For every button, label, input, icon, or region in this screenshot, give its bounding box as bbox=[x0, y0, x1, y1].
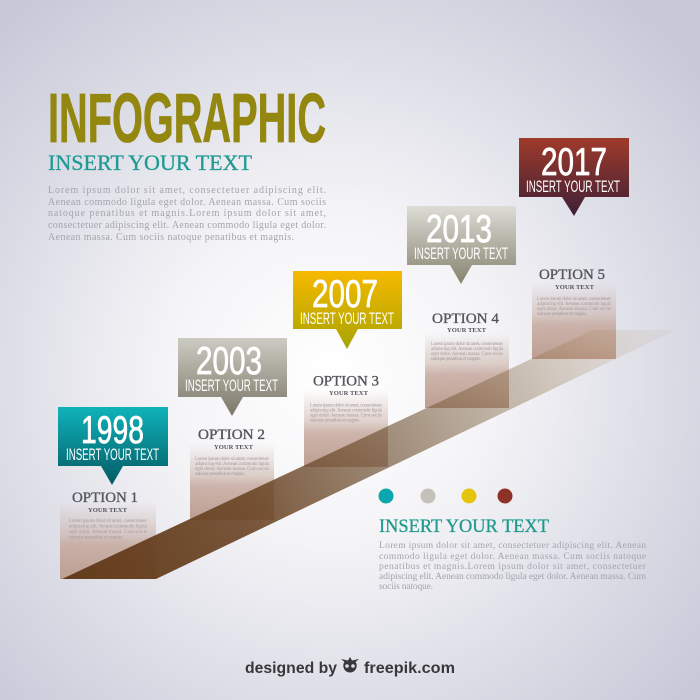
option 4 text bbox=[431, 311, 504, 362]
option card 3 bbox=[304, 390, 388, 467]
callout 1998: 1998 bbox=[81, 409, 144, 452]
lower text block bbox=[379, 541, 647, 592]
option 1 text bbox=[69, 490, 148, 540]
option card 2 bbox=[190, 443, 274, 520]
diagonal ribbon bbox=[62, 330, 676, 579]
intro text block: Lorem ipsum dolor sit amet, consectetuer adipiscing elit. bbox=[48, 185, 326, 196]
intro text block: consectetuer adipiscing elit. Aenean commodo ligula eget dolor. bbox=[48, 220, 326, 231]
intro text block: natoque penatibus et magnis.Lorem ipsum dolor sit amet, bbox=[48, 208, 326, 219]
option 5 text: natoque penatibus et magnis. bbox=[537, 312, 587, 317]
callout 2013: 2013 bbox=[426, 208, 492, 251]
option 5 text bbox=[537, 267, 612, 317]
option 5 text: Lorem ipsum dolor sit amet, consectetuer bbox=[537, 297, 611, 302]
callout 2007 bbox=[293, 271, 402, 349]
callout 2007: 2007 bbox=[312, 273, 378, 316]
callout 2003 bbox=[178, 338, 287, 416]
option 3 text: adipiscing elit. Aenean commodo ligula bbox=[310, 408, 383, 414]
footer credit: designed by bbox=[245, 660, 337, 677]
option 4 text: OPTION 4 bbox=[432, 311, 500, 327]
option 5 text: eget dolor. Aenean massa. Cum sociis bbox=[537, 307, 611, 312]
option card 5 bbox=[532, 283, 616, 359]
option 5 text: OPTION 5 bbox=[539, 267, 605, 283]
option 3 text bbox=[310, 374, 383, 424]
callout 2017: INSERT YOUR TEXT bbox=[526, 177, 620, 196]
lower text block: sociis natoque. bbox=[379, 582, 433, 592]
option 2 text: natoque penatibus et magnis. bbox=[195, 472, 245, 477]
option card 4 bbox=[425, 332, 509, 408]
intro text block bbox=[48, 185, 326, 243]
option 2 text: OPTION 2 bbox=[198, 427, 265, 443]
option 1 text: Lorem ipsum dolor sit amet, consectetuer bbox=[69, 519, 147, 524]
option card 1 bbox=[60, 502, 156, 579]
option 1 text: eget dolor. Aenean massa. Cum sociis bbox=[69, 530, 147, 535]
intro text block: Aenean massa. Cum sociis natoque penatibus et magnis. bbox=[48, 232, 294, 243]
callout 2013 bbox=[407, 206, 516, 284]
lower text block: Lorem ipsum dolor sit amet, consectetuer adipiscing elit. Aenean bbox=[379, 541, 646, 551]
option 5 text: adipiscing elit. Aenean commodo ligula bbox=[537, 302, 612, 307]
footer credit bbox=[245, 657, 455, 677]
option 5 text: YOUR TEXT bbox=[555, 284, 595, 291]
footer credit: freepik.com bbox=[364, 660, 455, 677]
option 2 text: adipiscing elit. Aenean commodo ligula bbox=[195, 462, 270, 467]
subtitle: INSERT YOUR TEXT bbox=[48, 150, 253, 175]
legend dots bbox=[378, 488, 512, 504]
callout 2017: 2017 bbox=[541, 141, 607, 184]
callout 1998: INSERT YOUR TEXT bbox=[66, 445, 159, 464]
callout 2003: INSERT YOUR TEXT bbox=[185, 376, 278, 395]
option 3 text: YOUR TEXT bbox=[329, 390, 369, 397]
option 2 text: YOUR TEXT bbox=[214, 444, 254, 451]
lower text block: penatibus et magnis.Lorem ipsum dolor sit amet, consectetuer bbox=[379, 562, 647, 572]
callout 2017 bbox=[519, 138, 629, 216]
callout 2003: 2003 bbox=[196, 340, 262, 383]
option 4 text: eget dolor. Aenean massa. Cum sociis bbox=[431, 352, 503, 357]
option 3 text: Lorem ipsum dolor sit amet, consectetuer bbox=[310, 404, 382, 408]
option 1 text: YOUR TEXT bbox=[88, 507, 128, 514]
option 4 text: adipiscing elit. Aenean commodo ligula bbox=[431, 347, 504, 352]
option 3 text: natoque penatibus et magnis. bbox=[310, 418, 360, 424]
option 2 text bbox=[195, 427, 270, 477]
option 1 text: natoque penatibus et magnis. bbox=[69, 536, 123, 540]
option 1 text: OPTION 1 bbox=[72, 490, 138, 506]
lower text block: adipiscing elit. Aenean commodo ligula eget dolor. Aenean massa. Cum bbox=[379, 572, 647, 582]
callout 2013: INSERT YOUR TEXT bbox=[414, 244, 508, 263]
callout 1998 bbox=[58, 407, 168, 485]
lower heading: INSERT YOUR TEXT bbox=[379, 516, 549, 537]
callout 2007: INSERT YOUR TEXT bbox=[300, 309, 394, 328]
option 1 text: adipiscing elit. Aenean commodo ligula bbox=[69, 524, 148, 530]
option 3 text: eget dolor. Aenean massa. Cum sociis bbox=[310, 414, 382, 418]
intro text block: Aenean commodo ligula eget dolor. Aenean massa. Cum sociis bbox=[48, 197, 326, 208]
lower text block: commodo ligula eget dolor. Aenean massa. Cum sociis natoque bbox=[379, 552, 646, 562]
option 2 text: Lorem ipsum dolor sit amet, consectetuer bbox=[195, 457, 269, 462]
option 2 text: eget dolor. Aenean massa. Cum sociis bbox=[195, 467, 269, 472]
option 4 text: Lorem ipsum dolor sit amet, consectetuer bbox=[431, 342, 503, 347]
icon: freepik logo bbox=[341, 657, 359, 672]
option 3 text: OPTION 3 bbox=[313, 374, 379, 390]
title: INFOGRAPHIC bbox=[48, 79, 326, 157]
option 4 text: YOUR TEXT bbox=[447, 327, 487, 334]
option 4 text: natoque penatibus et magnis. bbox=[431, 357, 481, 362]
